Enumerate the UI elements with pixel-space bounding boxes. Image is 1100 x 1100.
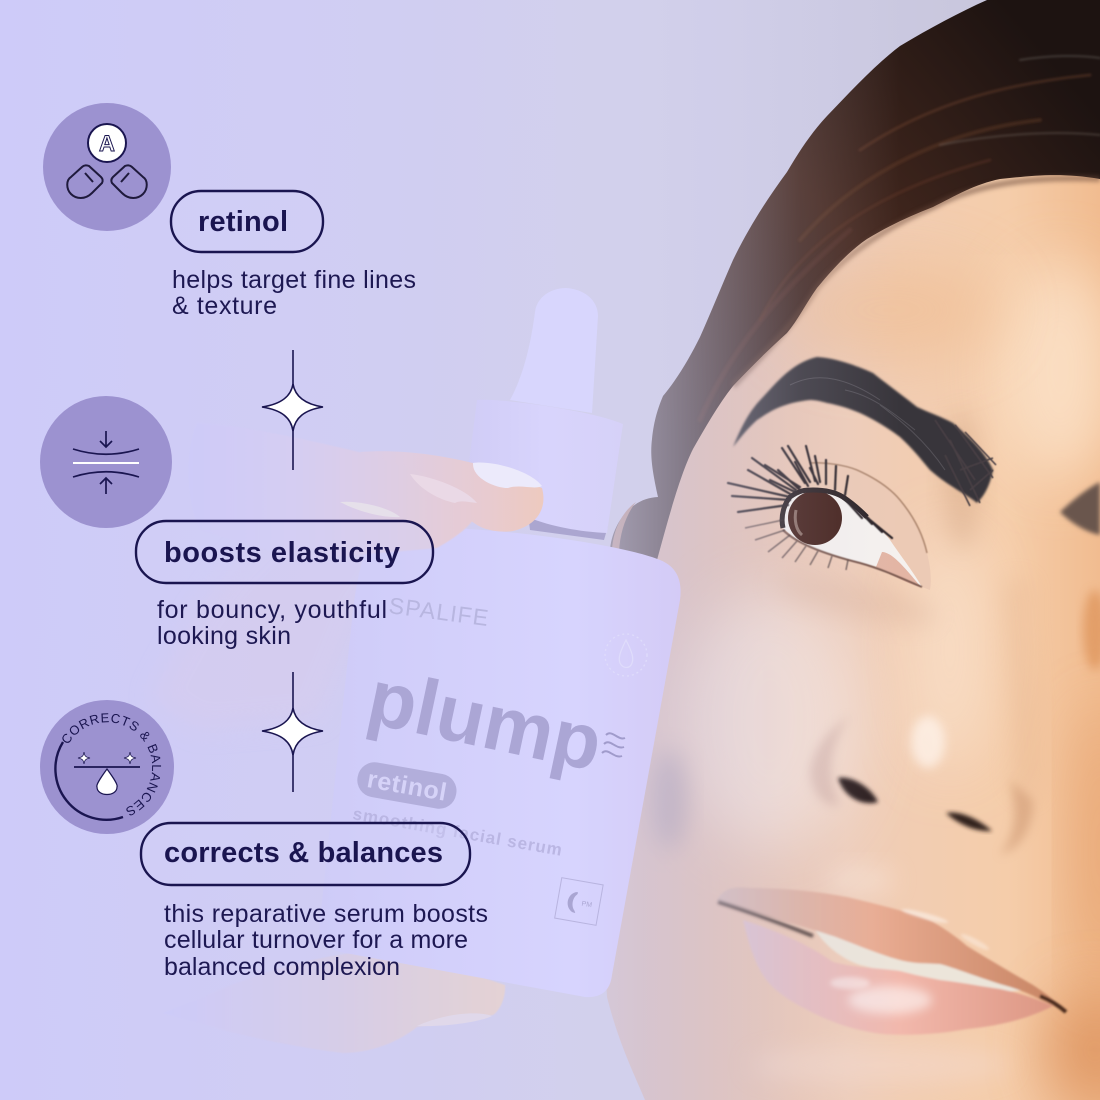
thumb nail <box>417 1013 492 1026</box>
lower lashes <box>745 520 848 570</box>
capsule right <box>111 165 147 198</box>
eye <box>728 446 931 590</box>
product name: plump: plump <box>360 652 610 788</box>
heading: boosts elasticity: boosts elasticity <box>164 537 400 569</box>
dropper bottle <box>320 288 681 997</box>
skin shading <box>650 260 1100 1100</box>
sparkle divider 1 <box>262 350 323 470</box>
descriptor text: smoothing facial serum <box>351 804 563 860</box>
left eyebrow <box>733 357 996 506</box>
text: corrects description: this reparative serum boosts <box>164 900 488 928</box>
text: elasticity description: for bouncy, youthful <box>157 596 387 624</box>
index finger <box>360 451 543 532</box>
palm of hand <box>150 530 420 730</box>
heading: corrects and balances <box>141 823 470 885</box>
dropper collar <box>468 400 623 533</box>
text: elasticity description: looking skin <box>157 622 291 650</box>
text: retinol description <box>172 266 416 320</box>
lips <box>717 887 1066 1035</box>
sparkle divider 2 <box>262 672 323 792</box>
text: elasticity description <box>157 596 387 650</box>
photo: woman's face <box>606 0 1100 1100</box>
PM box: PM <box>581 901 593 909</box>
heading: retinol <box>171 191 323 252</box>
seal badge <box>605 634 647 676</box>
icon: corrects and balances <box>40 700 174 834</box>
icon: vitamin A capsules <box>43 103 171 231</box>
vitamin A badge <box>88 124 126 162</box>
hairline softening <box>733 178 1100 386</box>
lower hand <box>163 950 505 1053</box>
eyelashes <box>728 446 892 538</box>
text: retinol description: helps target fine lines <box>172 266 416 294</box>
skin <box>606 175 1100 1100</box>
heading: retinol: retinol <box>198 206 288 238</box>
fingers holding bottle <box>188 423 543 560</box>
retinol badge <box>355 760 459 811</box>
right eyebrow <box>1060 482 1100 535</box>
heading: boosts elasticity <box>136 521 433 583</box>
text: retinol description: & texture <box>172 292 277 320</box>
wave icon <box>602 733 625 756</box>
ear edge <box>612 502 636 552</box>
nose <box>810 715 1033 855</box>
dropper neck shadow <box>528 514 608 540</box>
hair <box>610 0 1100 570</box>
PM box <box>555 878 603 925</box>
hair strands <box>700 56 1100 420</box>
heading: corrects and balances: corrects & balances <box>164 837 443 869</box>
curved label: CORRECTS & BALANCES <box>62 713 162 816</box>
retinol badge: retinol <box>365 765 449 807</box>
icon: elasticity <box>40 396 172 528</box>
brand: SPALIFE: SPALIFE <box>387 592 490 631</box>
bottle body <box>320 527 681 997</box>
icon: vitamin A capsules: A <box>99 131 115 156</box>
text: corrects description: balanced complexion <box>164 953 400 981</box>
dropper bulb <box>510 288 598 413</box>
text: corrects description <box>164 900 488 981</box>
middle finger and hand <box>188 423 477 560</box>
capsule left <box>67 165 103 198</box>
nails <box>473 462 542 488</box>
text: corrects description: cellular turnover for a more <box>164 926 468 954</box>
